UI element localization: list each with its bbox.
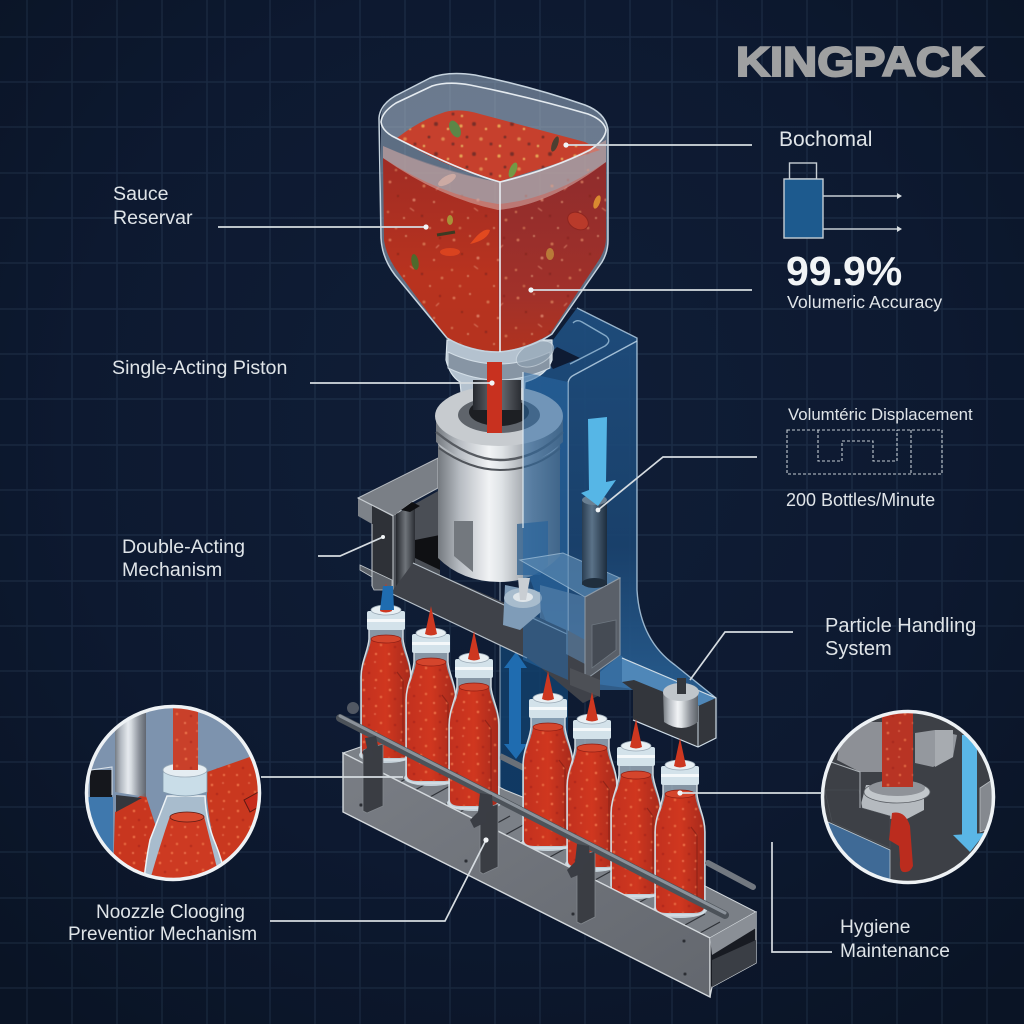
conveyor belt top with slats (343, 735, 756, 938)
dosing valve (503, 578, 542, 630)
logo: KINGPACK: KINGPACK (736, 38, 984, 85)
label: single-acting piston: Single-Acting Piston (112, 357, 287, 379)
single-acting piston (435, 362, 563, 582)
label: nozzle clogging prevention: Noozzle Clooging (96, 902, 245, 923)
front guide rail with clamps (340, 702, 725, 915)
rear guide rail (left span) (500, 756, 530, 771)
chart: displacement waveform (787, 430, 942, 474)
cross beam (384, 563, 600, 703)
pressure block (520, 553, 636, 697)
rear guide rail (right span) (708, 863, 753, 887)
translucent front band (383, 140, 606, 210)
left mounting bracket (358, 458, 440, 590)
blue-nozzle bottle (359, 583, 413, 763)
glass rim (379, 74, 608, 352)
hopper: sauce reservoir (379, 74, 608, 352)
label: particle handling system: System (825, 638, 892, 660)
bottle row (front four) (521, 671, 707, 918)
inset: anti-drip nozzle close-up (820, 710, 996, 884)
stat: 99.9%: 99.9% (786, 248, 902, 294)
hopper neck collar (446, 336, 558, 408)
guide rail posts (363, 744, 595, 924)
label: double-acting mechanism: Mechanism (122, 559, 222, 581)
chunks (410, 119, 602, 270)
label: volumetric accuracy: Volumeric Accuracy (787, 292, 942, 312)
sauce right face (498, 162, 606, 352)
sauce left face (383, 158, 498, 352)
stat: throughput: 200 Bottles/Minute (786, 490, 935, 510)
panel: blue machine tower (523, 308, 716, 705)
label: sauce reservoir: Sauce (113, 183, 169, 205)
label: volumetric displacement: Volumtéric Displacement (788, 405, 973, 424)
label: hygiene maintenance: Maintenance (840, 941, 950, 962)
icon: cylinder with output arrows (784, 163, 902, 238)
outlet arm with motor (622, 658, 716, 747)
label: double-acting mechanism: Double-Acting (122, 536, 245, 558)
bottle row (rear three) (359, 583, 501, 811)
label: particle handling system: Particle Handling (825, 615, 976, 637)
icon: double-headed flow arrow (504, 652, 527, 759)
label: bochomal: Bochomal (779, 128, 872, 151)
panel: rear lower blue column (500, 400, 568, 850)
label: hygiene maintenance: Hygiene (840, 917, 910, 938)
icon: downward displacement arrow (581, 417, 616, 506)
sauce top surface (397, 110, 600, 182)
label: sauce reservoir: Reservar (113, 207, 193, 229)
pushrod (582, 495, 607, 588)
sauce feed column (487, 362, 502, 433)
conveyor frame (343, 753, 756, 997)
clear front panel over piston (523, 372, 568, 680)
leader lines (218, 145, 832, 952)
label: nozzle clogging prevention: Preventior Mechanism (68, 924, 257, 945)
leader dots (381, 142, 683, 843)
inset: nozzle close-up (85, 700, 265, 887)
